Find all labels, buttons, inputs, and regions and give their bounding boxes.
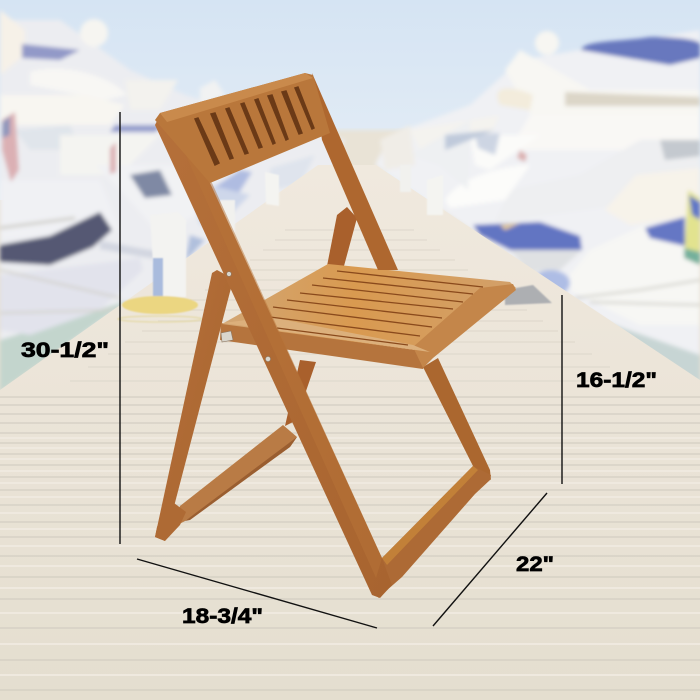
height line <box>119 112 121 544</box>
chair: right back upright <box>312 73 398 270</box>
width label: 18-3/4" <box>182 605 263 628</box>
depth label: 22" <box>516 553 554 576</box>
seat height label: 16-1/2" <box>576 369 657 392</box>
chair: front folding leg <box>155 270 231 541</box>
chair: seat underside and front edge <box>220 323 430 369</box>
chair: main side frame <box>155 112 392 598</box>
chair: back crossbar <box>172 425 297 528</box>
depth line <box>433 493 547 626</box>
chair: backrest panel <box>155 73 330 183</box>
dimension: width 18-3/4 in <box>137 559 377 628</box>
background: left moored yachts <box>0 10 345 392</box>
chair: rear strut <box>285 207 357 426</box>
dimension: depth 22 in <box>433 493 554 626</box>
seat height line <box>561 295 563 484</box>
height label: 30-1/2" <box>21 339 109 362</box>
chair: rear leg <box>423 358 491 480</box>
chair: slatted seat <box>222 264 516 368</box>
dock pedestals and rope <box>118 165 552 322</box>
chair: foot bar <box>378 466 491 598</box>
chair: metal hardware <box>221 272 271 362</box>
background: right moored yachts <box>375 30 700 385</box>
background: marina sky <box>0 0 700 200</box>
background: far shore <box>335 130 405 170</box>
chair <box>155 73 516 598</box>
width line <box>137 559 377 628</box>
background: wooden dock <box>0 165 700 700</box>
